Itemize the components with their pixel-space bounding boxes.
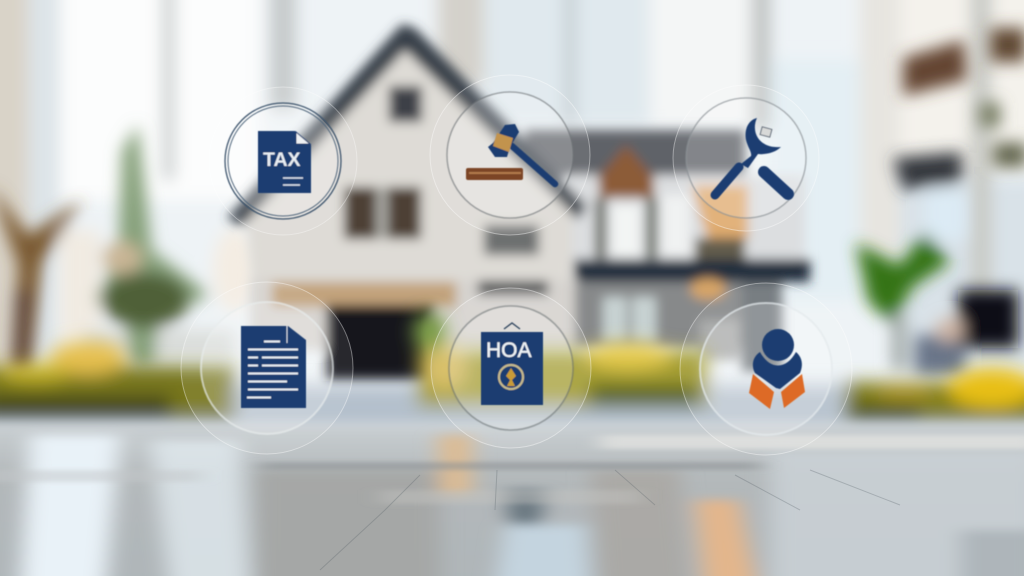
left palm and tree xyxy=(0,125,257,372)
glass badge: tax document xyxy=(209,87,357,235)
house xyxy=(227,24,810,381)
ground and hedges xyxy=(0,313,1024,430)
icon: gavel xyxy=(466,124,555,184)
glass badge: person with ribbon xyxy=(680,283,852,455)
icon: tax document: TAX xyxy=(263,149,301,171)
glass badge: wrench and tool xyxy=(673,85,819,231)
glass badge: document xyxy=(181,282,353,454)
icon: document xyxy=(241,326,306,408)
glass badge: gavel xyxy=(430,75,590,235)
icon: wrench xyxy=(715,118,788,195)
icon: HOA sign xyxy=(481,323,543,405)
icon: HOA sign: HOA xyxy=(486,339,532,362)
wooden floor xyxy=(0,424,1024,576)
icon: person xyxy=(749,329,805,409)
right shelves and plant xyxy=(856,28,1024,375)
glass badge: HOA sign xyxy=(431,288,591,448)
icon: tax document xyxy=(258,131,311,193)
